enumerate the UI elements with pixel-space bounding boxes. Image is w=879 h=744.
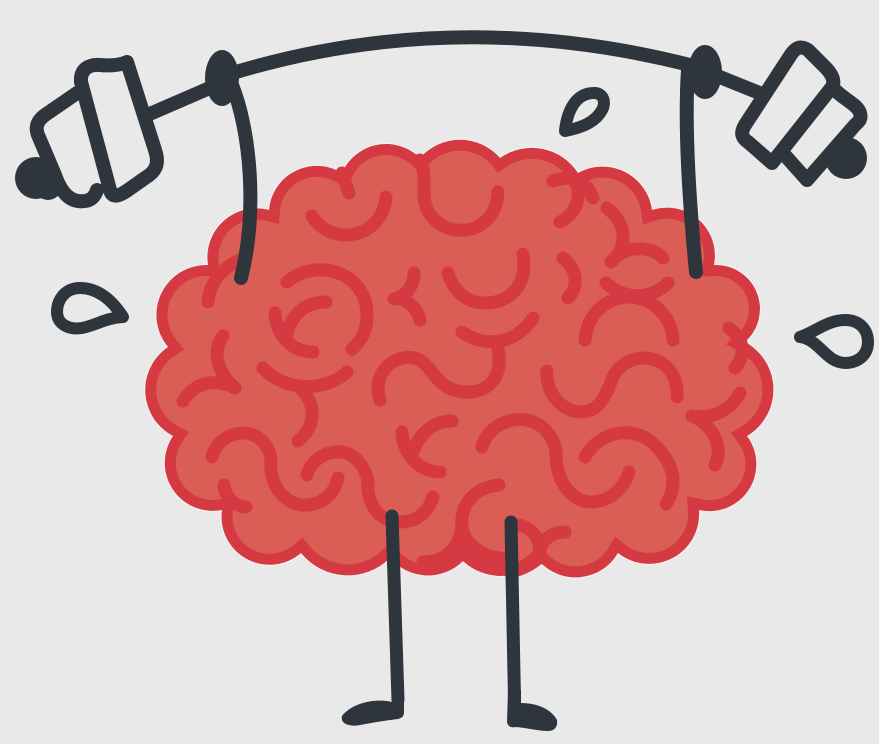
sweat drop: right bbox=[800, 320, 868, 363]
left weight bbox=[15, 62, 157, 201]
right weight bbox=[742, 48, 867, 180]
brain folds bbox=[183, 160, 742, 585]
right disc collar bbox=[688, 45, 722, 99]
left disc collar bbox=[205, 50, 239, 106]
barbell bbox=[15, 37, 867, 201]
left arm bbox=[232, 85, 250, 278]
right arm bbox=[687, 70, 696, 272]
brain body outline bbox=[145, 140, 773, 577]
sweat drop: left bbox=[57, 288, 123, 328]
bar bbox=[145, 37, 762, 116]
sweat drop: top bbox=[565, 93, 604, 131]
right leg and foot bbox=[507, 522, 557, 731]
left leg and foot bbox=[342, 516, 404, 726]
brain bbox=[145, 140, 773, 585]
